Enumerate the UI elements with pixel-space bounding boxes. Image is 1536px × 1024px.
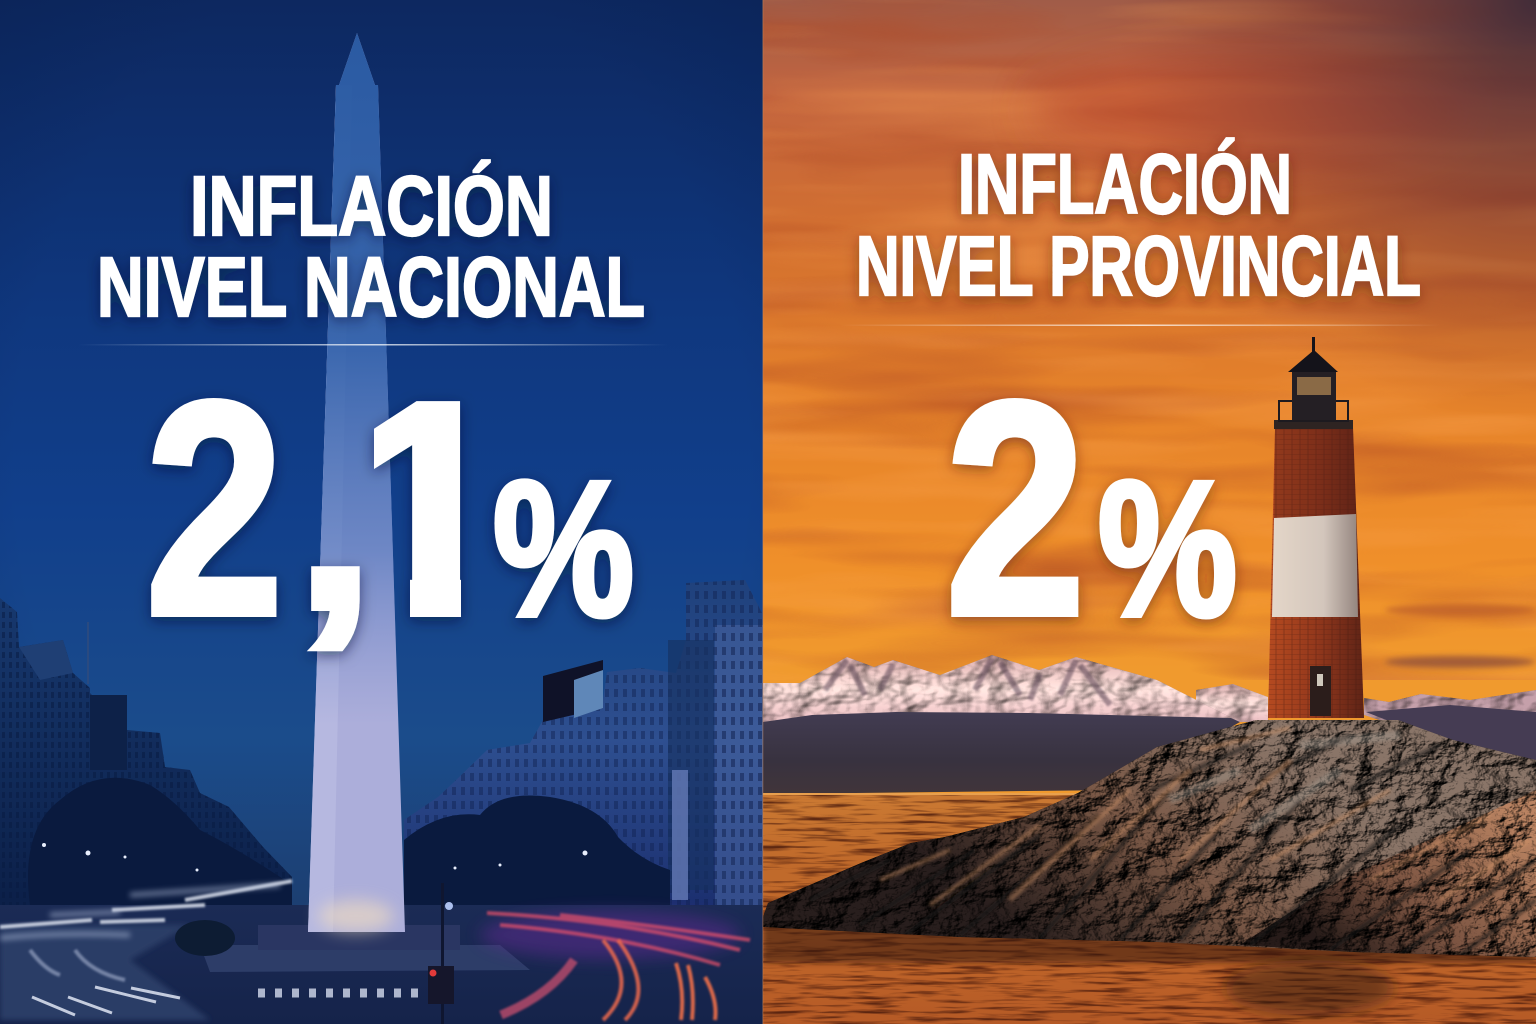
divider: nacional	[78, 344, 668, 346]
billboard	[543, 660, 603, 722]
rocky island	[763, 720, 1536, 957]
heading: nacional	[97, 159, 645, 334]
seam between panels	[762, 0, 764, 1024]
heading: nacional: INFLACIÓN	[190, 159, 553, 253]
value: 2,1%: 1	[344, 338, 514, 679]
value: 2,1%: ,	[294, 374, 376, 664]
lighthouse	[1268, 337, 1364, 718]
buildings left	[0, 598, 292, 910]
value: 2,1%: 2	[145, 338, 284, 679]
value: 2%: %	[1098, 441, 1237, 656]
panel: nacional	[0, 0, 763, 1024]
avenue with light trails	[0, 843, 763, 1024]
heading: provincial: INFLACIÓN	[958, 137, 1292, 231]
sunset sky	[763, 0, 1536, 800]
buildings right	[404, 580, 763, 905]
panel: provincial	[763, 0, 1536, 1024]
heading: provincial	[856, 137, 1421, 313]
value: 2%: 2	[945, 338, 1086, 679]
obelisk	[308, 33, 405, 932]
sea	[763, 793, 1536, 1024]
value: 2,1%: %	[493, 441, 634, 656]
value: 2,1%	[143, 394, 640, 665]
night sky background	[0, 0, 763, 905]
heading: nacional: NIVEL NACIONAL	[97, 240, 645, 334]
value: 2%	[945, 338, 1237, 679]
divider: provincial	[840, 324, 1440, 326]
mountains	[763, 655, 1536, 794]
